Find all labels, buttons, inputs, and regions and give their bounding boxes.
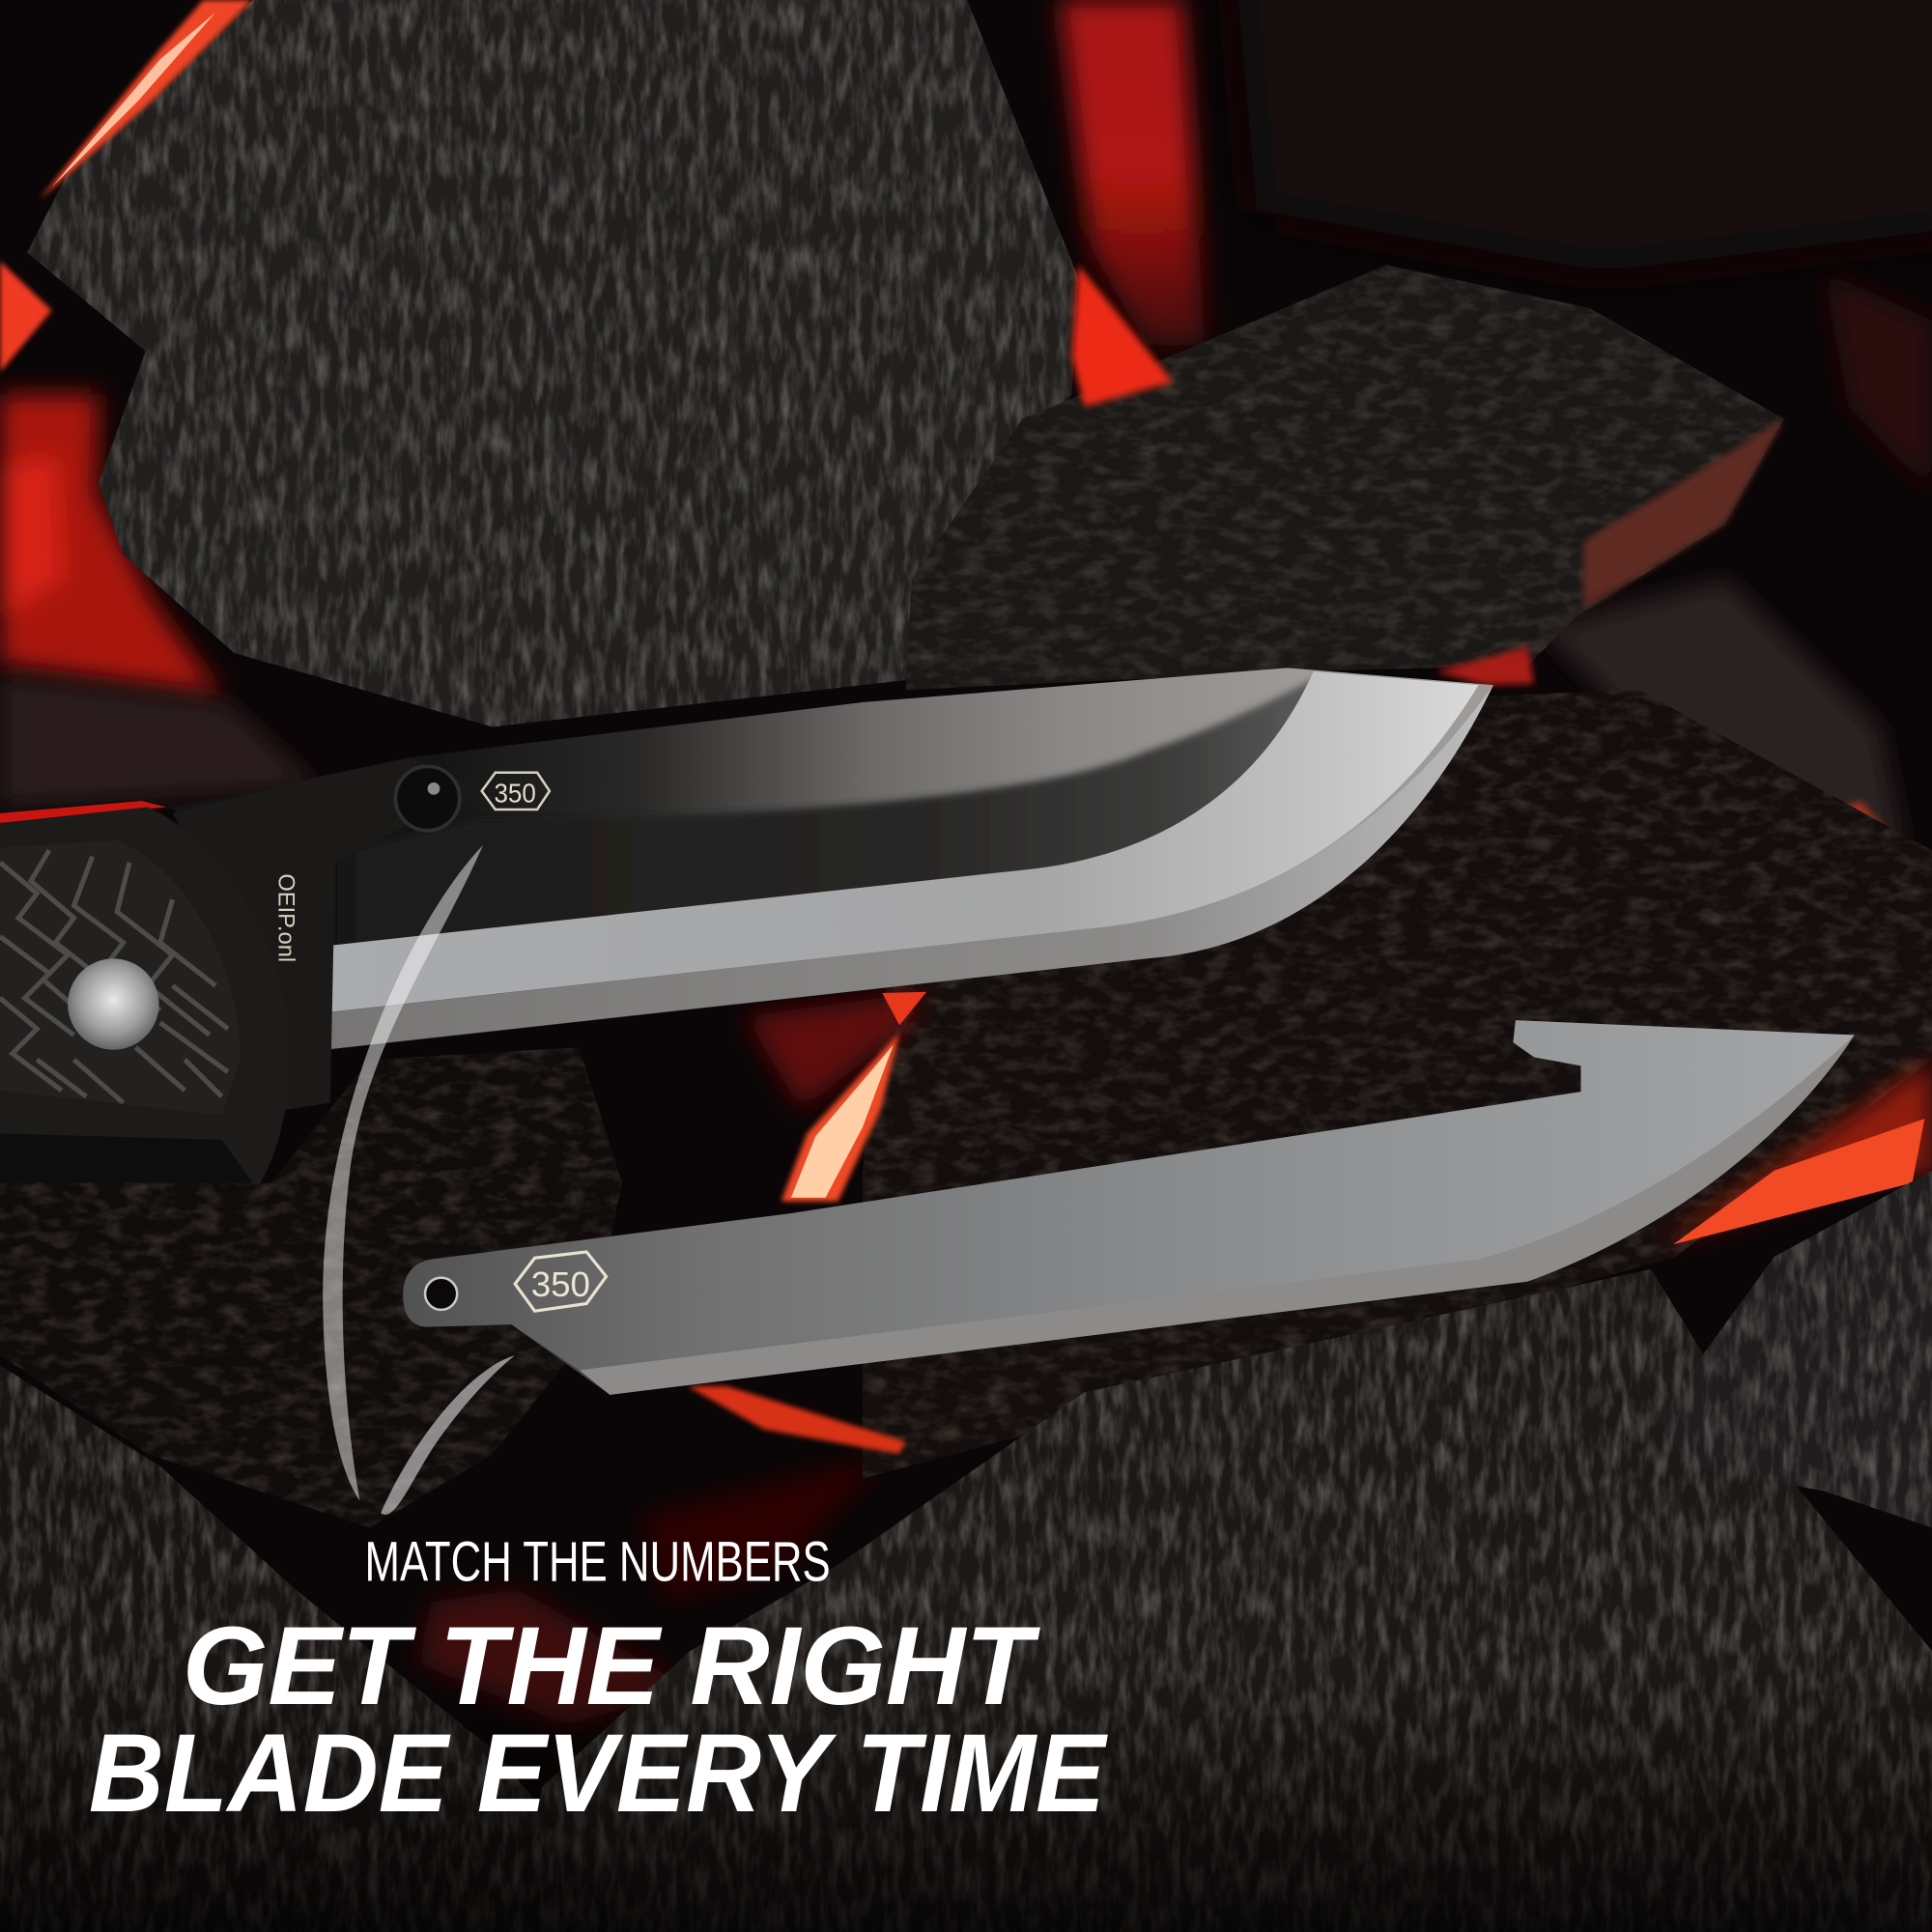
coal: top-right dim haze [1233,0,1932,271]
ember: bright streaks [0,0,1932,1530]
coal: large upper-left block [27,0,1078,727]
arrow: swoosh to blade badge [381,1355,515,1515]
headline: GET THE RIGHT [183,1605,1041,1728]
badge: 350 on knife: 350 [494,778,536,808]
knife: folding knife with black handle [0,668,1493,1185]
badge: 350 on blade: 350 [531,1265,590,1304]
coal: middle right slab [863,690,1932,1479]
subheading: MATCH THE NUMBERS [365,1530,831,1593]
handle: screw [68,958,159,1050]
shadow: bottom darkening [0,1663,1932,1932]
pivot pin [395,766,460,831]
badge: 350 on knife [482,773,550,810]
engraved text: OEIP.onl [272,873,298,962]
replacement gut-hook blade [403,1020,1855,1395]
coal: upper-right block [906,265,1904,850]
blade hole [425,1278,457,1310]
coal: right chunk [1658,1171,1932,1528]
handle [0,774,383,1184]
coal: behind left of blade [0,675,321,807]
arrow: swoosh to knife badge [323,845,483,1501]
coal: left slab under knife [0,1047,622,1528]
blade: upper knife [173,668,1493,1050]
headline: BLADE EVERY TIME [89,1712,1108,1835]
coal: bottom right mass [518,1269,1932,1932]
coal: bottom left mass [0,1365,616,1932]
headline [89,1605,1108,1835]
badge: 350 on blade [515,1252,607,1311]
